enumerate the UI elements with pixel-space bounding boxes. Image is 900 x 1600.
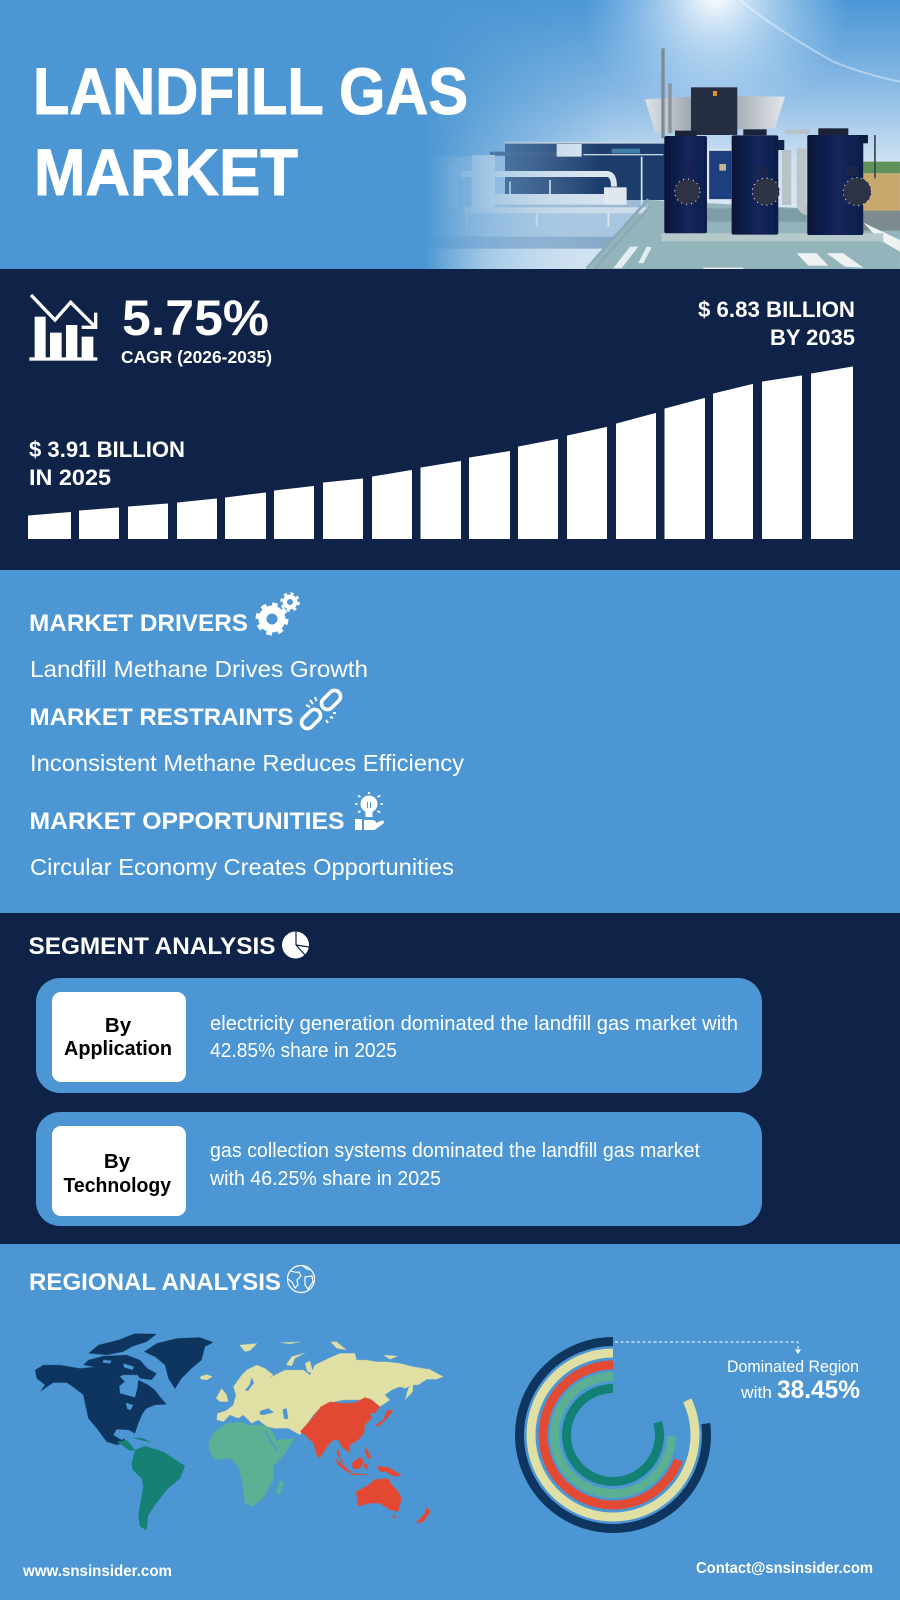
label: by technology: By [104,1150,131,1173]
panel: market size [0,269,900,570]
CAGR label: CAGR (2026-2035) [121,347,272,367]
callout: dominated region: Dominated Region [727,1358,859,1376]
plant scene [420,0,900,270]
text: restraint: Inconsistent Methane Reduces Efficiency [30,750,464,776]
panel: market dynamics [29,594,464,880]
callout: dominated region [615,1342,860,1404]
icon: globe [288,1266,314,1292]
sky [400,0,900,270]
text: technology finding: with 46.25% share in 2025 [209,1168,441,1190]
label: by application: Application [64,1037,172,1060]
icon: chart with arrow [29,295,97,361]
2035 value label: $ 6.83 BILLION [698,297,855,322]
region: africa and middle east [208,1422,295,1507]
icon: pie chart [282,931,309,958]
region: asia pacific [300,1397,431,1523]
text: technology finding [209,1140,700,1190]
label box: by technology [52,1126,186,1216]
region: north america [35,1333,213,1445]
heading: regional analysis: REGIONAL ANALYSIS [29,1269,281,1296]
title: MARKET [34,135,298,209]
2025 value label: $ 3.91 BILLION [29,437,185,462]
text: opportunity: Circular Economy Creates Opportunities [30,854,454,880]
panel: segment analysis [0,913,900,1244]
heading: market restraints: MARKET RESTRAINTS [30,704,294,731]
callout: dominated region: with [740,1384,772,1402]
label: by application: By [105,1014,132,1037]
map: world regions [35,1333,443,1530]
text: application finding: electricity generation dominated the landfill gas market with [210,1013,738,1035]
CAGR value: 5.75% [122,290,269,346]
title [33,54,468,209]
2035 value label [698,297,855,350]
icon: gears [258,594,298,634]
callout: dominated region: 38.45% [777,1376,860,1404]
icon: broken chain link [299,688,343,731]
heading: market opportunities: MARKET OPPORTUNITIES [30,808,344,835]
hero photo: landfill gas plant [400,0,900,270]
radial bar chart: regional share [519,1342,706,1529]
icon: lightbulb in hand [355,792,384,830]
label: by technology: Technology [64,1174,172,1197]
title: LANDFILL GAS [33,54,468,128]
text: driver: Landfill Methane Drives Growth [30,656,368,682]
bar chart: market growth [28,367,852,538]
text: application finding [210,1013,738,1062]
2025 value label [29,437,185,490]
region: europe and north asia [200,1342,443,1435]
label: by technology [64,1150,172,1197]
label box: by application [52,992,186,1082]
text: application finding: 42.85% share in 2025 [210,1040,397,1062]
card: by technology [36,1112,762,1226]
heading: segment analysis: SEGMENT ANALYSIS [28,933,276,960]
2035 value label: BY 2035 [770,325,855,350]
footer: website: www.snsinsider.com [22,1563,172,1580]
region: latin america [117,1437,185,1530]
text: technology finding: gas collection systems dominated the landfill gas market [210,1140,700,1162]
card: by application [36,978,762,1093]
heading: market drivers: MARKET DRIVERS [29,610,248,637]
2025 value label: IN 2025 [29,465,111,490]
footer: contact: Contact@snsinsider.com [696,1560,873,1577]
label: by application [64,1014,172,1060]
